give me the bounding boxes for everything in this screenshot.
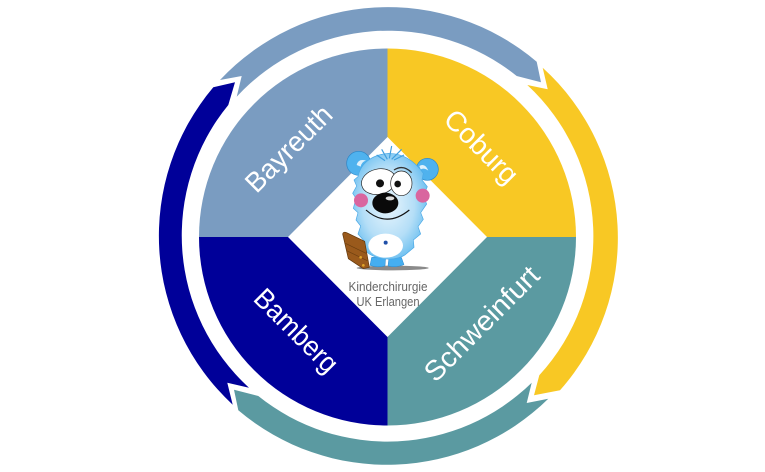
panel: Bayreuth: [199, 48, 388, 237]
left pupil: [376, 179, 384, 187]
arrow: Bamberg ring segment: [159, 82, 249, 405]
nose highlight: [386, 196, 394, 200]
belly: [368, 234, 403, 258]
caption line 1: Kinderchirurgie: [348, 279, 428, 294]
label: Bayreuth: Bayreuth: [239, 99, 338, 198]
head tuft: [377, 146, 404, 161]
body: [353, 153, 427, 259]
eyebrow: [394, 168, 412, 173]
panel: Schweinfurt: [388, 237, 576, 426]
caption: [348, 279, 428, 309]
panel: Bamberg: [199, 237, 388, 426]
left ear: [347, 151, 371, 175]
right pupil: [394, 181, 401, 187]
label: Schweinfurt: Schweinfurt: [418, 259, 546, 388]
suitcase: [343, 232, 369, 269]
right eye: [391, 171, 412, 196]
icon: bear mascot with suitcase: [343, 146, 438, 270]
left eye: [359, 166, 398, 198]
nose: [372, 193, 398, 213]
smile: [366, 210, 409, 219]
label: Coburg: Coburg: [438, 103, 525, 190]
caption line 2: UK Erlangen: [356, 294, 420, 309]
ground shadow: [357, 266, 429, 270]
centre diamond: [288, 137, 487, 337]
arrow: Coburg ring segment: [527, 68, 618, 395]
feet: [370, 257, 404, 267]
panel: Coburg: [388, 48, 576, 237]
left cheek: [354, 193, 368, 207]
label: Bamberg: Bamberg: [248, 282, 345, 379]
arrow: Bayreuth ring segment: [220, 7, 541, 97]
right cheek: [416, 189, 430, 203]
arrow: Schweinfurt ring segment: [234, 383, 548, 465]
right ear: [416, 158, 438, 180]
navel: [384, 241, 388, 245]
